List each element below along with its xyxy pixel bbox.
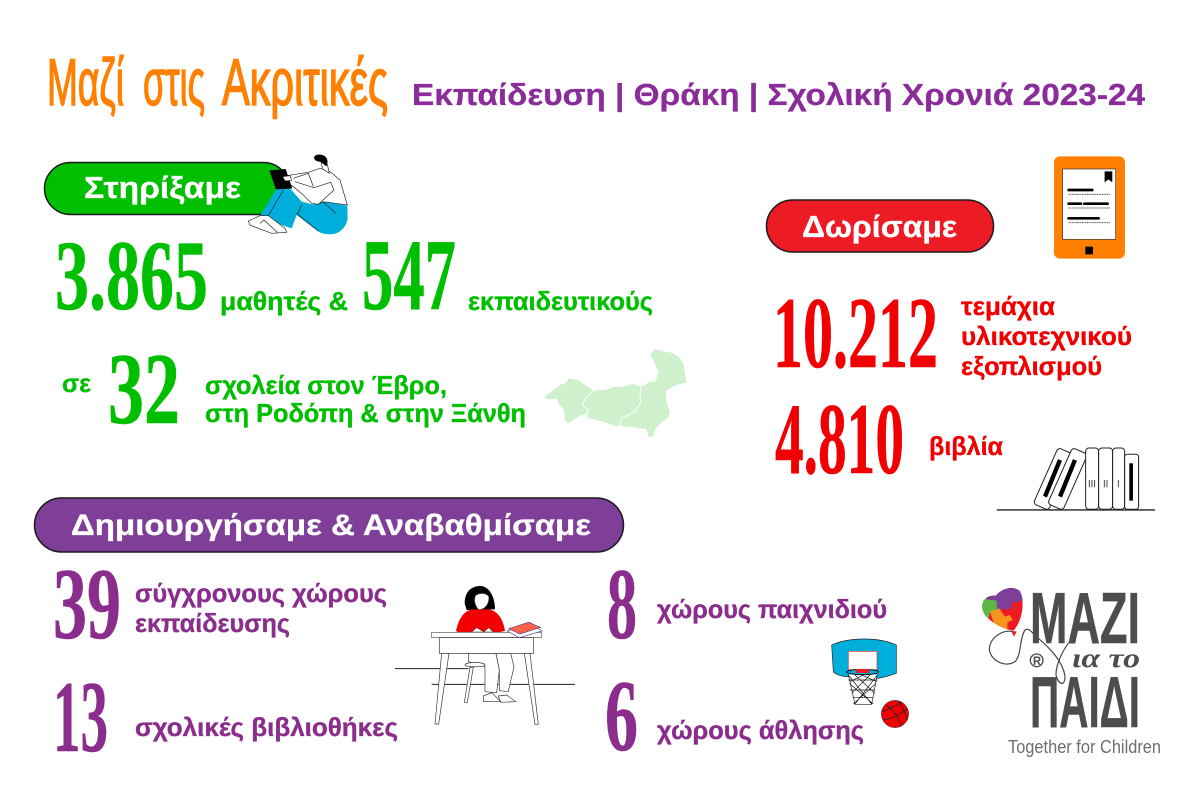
stat: 32 σχολεία: σχολεία στον Έβρο, — [205, 370, 447, 400]
logo balloon — [980, 585, 1068, 683]
heading pill: Δωρίσαμε: Δωρίσαμε — [802, 209, 957, 244]
map: Thrace — [544, 349, 687, 437]
stat: 32 σχολεία: σε — [62, 368, 91, 398]
icon: basketball hoop and ball — [832, 639, 909, 728]
logo wordmark: ια το — [1072, 643, 1140, 673]
stat: 10.212 τεμάχια: 10.212 — [773, 277, 938, 390]
stat: 8 χώρους παιχνιδιού: χώρους παιχνιδιού — [657, 594, 887, 624]
icon: e-reader tablet — [1054, 156, 1125, 259]
stat: 13 σχολικές βιβλιοθήκες: 13 — [53, 661, 108, 774]
icon: books on shelf — [997, 448, 1155, 510]
stat: 10.212 τεμάχια: εξοπλισμού — [961, 351, 1102, 381]
stat: 39 σύγχρονους χώρους: εκπαίδευσης — [135, 608, 290, 638]
stat: 547 εκπαιδευτικούς — [362, 219, 653, 332]
logo: Μαζί για το Παιδί — [980, 579, 1161, 757]
heading pill: Στηρίξαμε — [44, 162, 290, 214]
stat: 39 σύγχρονους χώρους: σύγχρονους χώρους — [135, 578, 387, 608]
stat: 32 σχολεία: στη Ροδόπη & στην Ξάνθη — [205, 398, 526, 428]
stat: 8 χώρους παιχνιδιού: 8 — [607, 548, 637, 661]
stat: 32 σχολεία: 32 — [108, 333, 180, 446]
stat: 13 σχολικές βιβλιοθήκες: σχολικές βιβλιοθήκες — [135, 712, 398, 742]
stat: 6 χώρους άθλησης: χώρους άθλησης — [657, 715, 864, 745]
stat: 547 εκπαιδευτικούς: 547 — [362, 219, 456, 332]
title: Ακριτικές — [222, 45, 388, 119]
stat: 6 χώρους άθλησης: 6 — [605, 660, 638, 773]
subtitle: Εκπαίδευση | Θράκη | Σχολική Χρονιά 2023-24 — [412, 77, 1146, 112]
logo wordmark — [1030, 579, 1140, 743]
stat: 3.865 μαθητές: 3.865 — [55, 220, 208, 331]
panel: Δωρίσαμε — [766, 156, 1155, 510]
heading pill: Δημιουργήσαμε & Αναβαθμίσαμε: Δημιουργήσαμε & Αναβαθμίσαμε — [71, 509, 591, 542]
logo tagline: Together for Children — [1008, 737, 1161, 757]
heading pill: Στηρίξαμε: Στηρίξαμε — [84, 170, 241, 205]
stat: 13 σχολικές βιβλιοθήκες — [53, 661, 398, 774]
heading pill: Δημιουργήσαμε & Αναβαθμίσαμε — [34, 498, 624, 552]
stat: 10.212 τεμάχια: τεμάχια — [961, 291, 1055, 321]
title — [47, 45, 388, 119]
panel: Στηρίξαμε — [44, 155, 687, 446]
stat: 8 χώρους παιχνιδιού — [607, 548, 887, 661]
stat: 10.212 τεμάχια: υλικοτεχνικού — [961, 321, 1132, 351]
icon: student at desk — [395, 586, 575, 724]
icon: person with tablet — [248, 155, 348, 234]
stat: 3.865 μαθητές: μαθητές & — [220, 286, 348, 316]
stat: 39 σύγχρονους χώρους — [53, 548, 387, 661]
stat: 547 εκπαιδευτικούς: εκπαιδευτικούς — [468, 286, 653, 316]
stat: 6 χώρους άθλησης — [605, 660, 864, 773]
stat: 4.810 βιβλία: 4.810 — [775, 383, 904, 496]
title: Μαζί — [47, 45, 124, 119]
stat: 32 σχολεία — [62, 333, 526, 446]
panel: Δημιουργήσαμε & Αναβαθμίσαμε — [34, 498, 909, 774]
logo wordmark: R — [1033, 654, 1041, 668]
title: στις — [143, 45, 205, 119]
stat: 4.810 βιβλία: βιβλία — [929, 431, 1003, 461]
heading pill: Δωρίσαμε — [766, 200, 994, 252]
stat: 39 σύγχρονους χώρους: 39 — [53, 548, 121, 661]
